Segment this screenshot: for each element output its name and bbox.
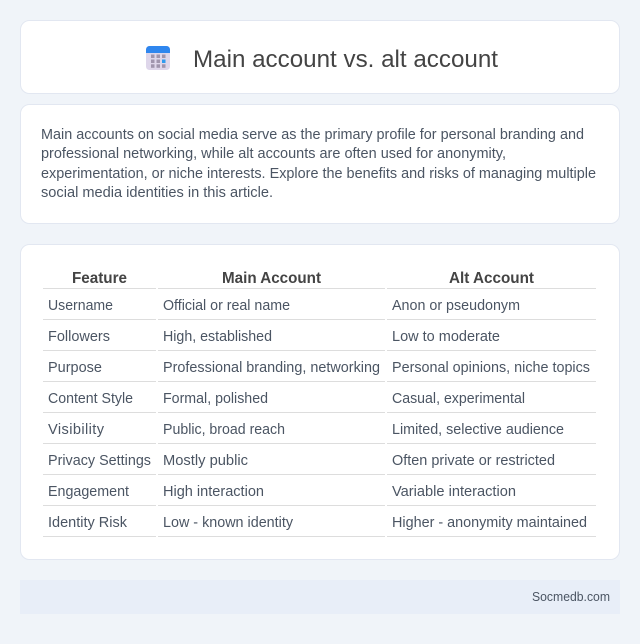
panel: title card xyxy=(20,20,620,94)
row: content style xyxy=(48,391,525,407)
row: engagement: Engagement xyxy=(48,484,129,500)
row: identity risk: Identity Risk xyxy=(48,515,128,531)
row: content style: Content Style xyxy=(48,391,133,407)
row: visibility: Public, broad reach xyxy=(163,422,285,438)
row: username: Official or real name xyxy=(163,298,290,314)
row: privacy settings xyxy=(48,453,555,469)
intro paragraph: Main accounts on social media serve as the primary profile for personal branding and xyxy=(41,127,584,143)
row: visibility xyxy=(48,422,564,438)
row: privacy settings: Privacy Settings xyxy=(48,453,151,469)
row: identity risk: Low - known identity xyxy=(163,515,294,531)
row: engagement: High interaction xyxy=(163,484,264,500)
row: purpose: Personal opinions, niche topics xyxy=(392,360,590,376)
row: privacy settings: Often private or restricted xyxy=(392,453,555,469)
intro paragraph: social media identities in this article. xyxy=(41,185,273,201)
row: followers: Followers xyxy=(48,329,110,345)
row: purpose: Purpose xyxy=(48,360,102,376)
row: identity risk xyxy=(48,515,587,531)
table header: Feature xyxy=(72,270,127,287)
table header xyxy=(72,270,535,287)
row: content style: Casual, experimental xyxy=(392,391,525,407)
panel: comparison table xyxy=(20,244,620,560)
intro paragraph xyxy=(41,127,596,201)
row: username xyxy=(48,298,520,314)
row: identity risk: Higher - anonymity maintained xyxy=(392,515,587,531)
row: visibility: Visibility xyxy=(48,422,105,438)
row: privacy settings: Mostly public xyxy=(163,453,248,469)
panel: intro text xyxy=(20,104,620,224)
row: username: Anon or pseudonym xyxy=(392,298,520,314)
row: username: Username xyxy=(48,298,113,314)
row: purpose xyxy=(48,360,590,376)
row: purpose: Professional branding, networking xyxy=(163,360,380,376)
icon: calendar xyxy=(146,46,170,70)
title: Main account vs. alt account xyxy=(193,46,498,73)
intro paragraph: professional networking, while alt accounts are often used for anonymity, xyxy=(41,146,506,162)
row: followers: Low to moderate xyxy=(392,329,500,345)
footer bar xyxy=(20,580,620,614)
intro paragraph: experimentation, or niche interests. Explore the benefits and risks of managing multiple xyxy=(41,166,596,182)
row: followers xyxy=(48,329,500,345)
row: visibility: Limited, selective audience xyxy=(392,422,564,438)
row: engagement xyxy=(48,484,516,500)
row: content style: Formal, polished xyxy=(163,391,268,407)
footer text: Socmedb.com xyxy=(532,590,610,604)
row: engagement: Variable interaction xyxy=(392,484,516,500)
table header: Alt Account xyxy=(449,270,535,287)
row: followers: High, established xyxy=(163,329,272,345)
table header: Main Account xyxy=(222,270,322,287)
